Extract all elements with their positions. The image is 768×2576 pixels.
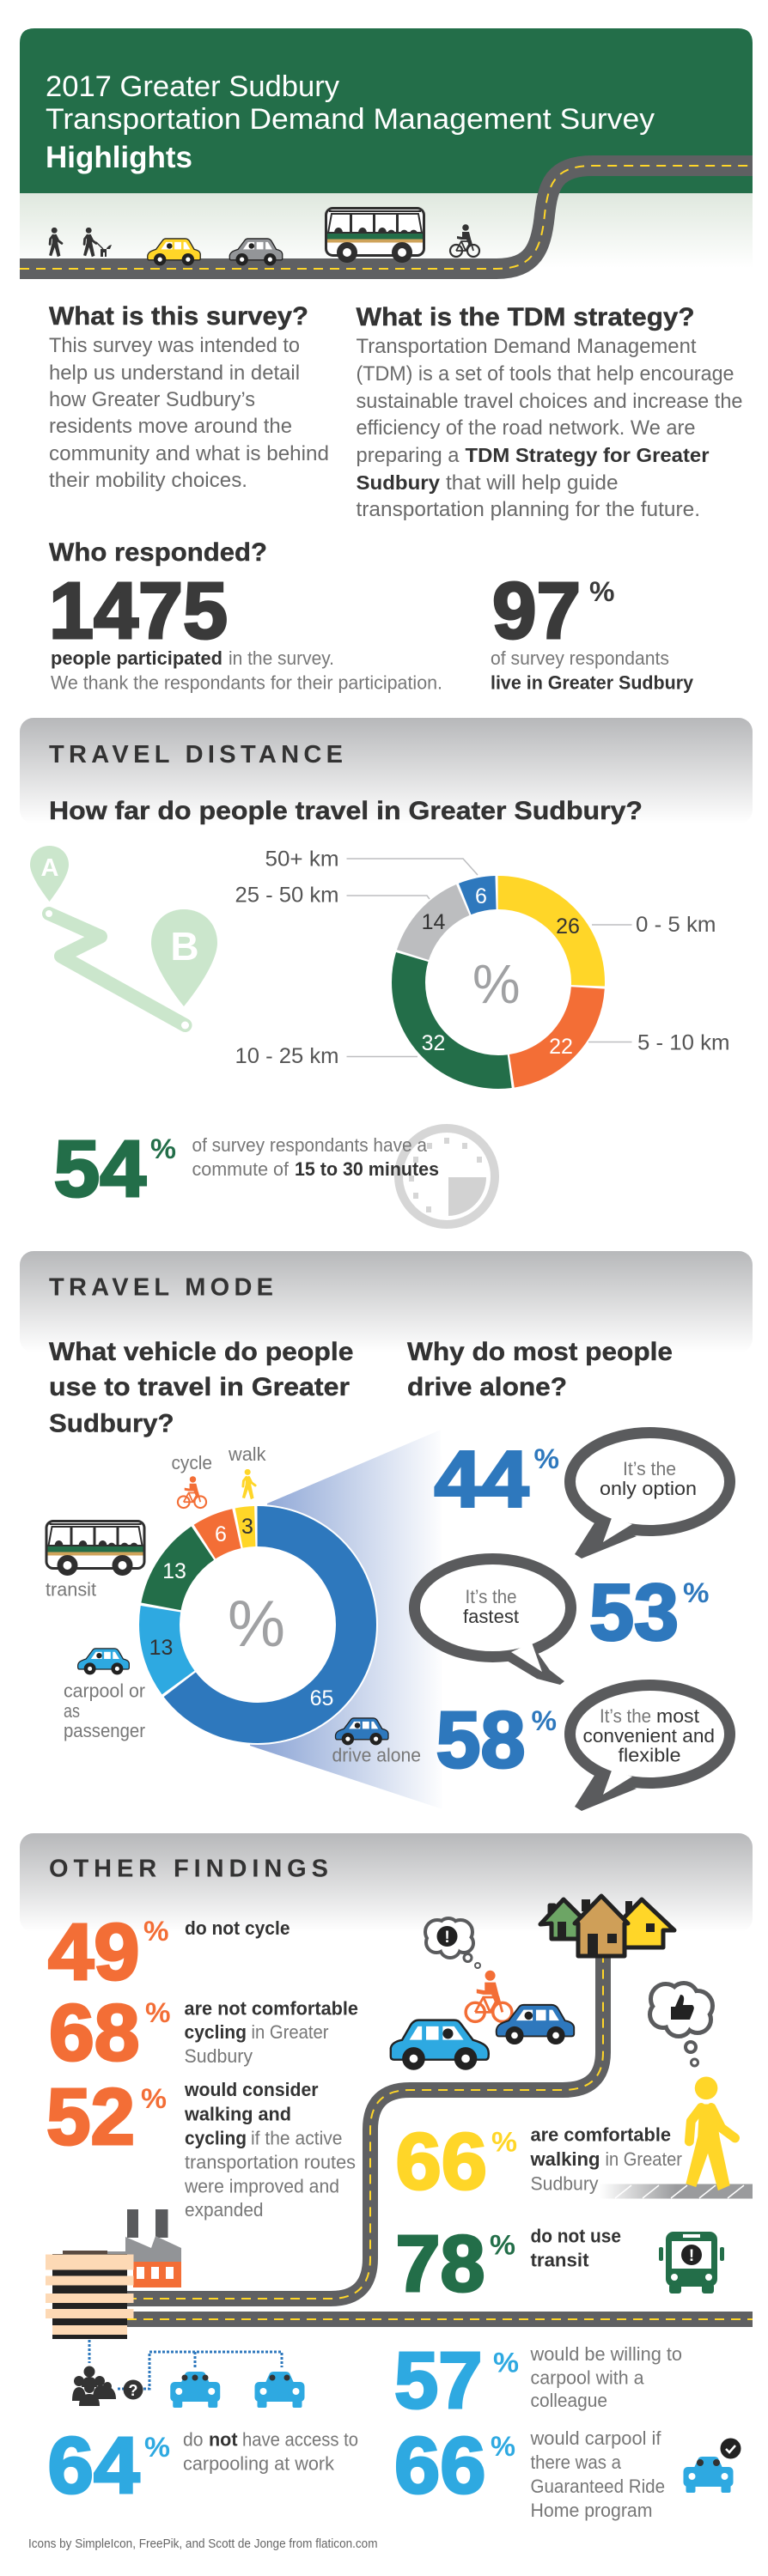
callout: most convenient and flexible: convenient and [582,1725,715,1747]
stat: 97 percent: 97 [492,566,581,655]
text block [49,334,329,492]
stat: 58 percent: % [531,1705,557,1736]
stat: 66 percent carpool [394,2421,665,2521]
label: carpool or as passenger: carpool or [64,1680,145,1702]
donut chart: travel mode: 6 [215,1522,227,1546]
section band [20,1833,753,1932]
callout: fastest: fastest [463,1606,519,1627]
donut chart: travel mode: 13 [162,1559,186,1583]
icon: person walking dog [83,228,112,257]
icon: map route with pins: A [41,854,59,882]
stat: 66 percent walking: 66 [395,2117,487,2206]
icon: worried thought bubble [427,1920,480,1968]
text block: sustainable travel choices and increase the [356,390,742,413]
text block: community and what is behind [49,442,329,465]
stat: 52 percent: % [141,2083,167,2114]
stat: 49 percent: 49 [48,1907,139,1996]
stat: 66 percent carpool: Home program [531,2500,653,2521]
callout: most convenient and flexible: flexible [619,1745,680,1765]
icon: group of people [72,2366,116,2406]
heading: why drive alone [407,1338,673,1401]
donut legend labels: 25 - 50 km [235,883,338,907]
stat: 57 percent [394,2336,682,2425]
text block: help us understand in detail [49,361,300,385]
donut chart: travel distance: 6 [475,884,487,908]
stat: 68 percent: 68 [49,1988,139,2077]
callout: only option [570,1432,730,1558]
heading: How far do people travel in Greater Sudbury? [49,797,643,825]
stat: 66 percent walking [395,2117,682,2206]
stat: 57 percent: carpool with a [531,2366,644,2389]
header green panel [20,28,753,193]
heading: what vehicle [49,1338,354,1437]
heading: What is this survey? [49,302,308,331]
stat: 57 percent: would be willing to [530,2343,682,2365]
donut chart: travel distance: 22 [549,1035,573,1059]
text block: transportation planning for the future. [356,498,700,521]
stat: 78 percent transit: transit [531,2250,589,2270]
stat: 64 percent: % [144,2432,170,2463]
stat: 64 percent: carpooling at work [183,2452,335,2475]
heading: What is the TDM strategy? [356,303,694,331]
panel: what is the TDM strategy [356,303,742,521]
text block: (TDM) is a set of tools that help encourage [356,362,734,386]
stat: 54 percent commute [53,1124,439,1213]
donut chart: travel distance: 14 [422,910,445,934]
stat: 66 percent walking: in Greater [605,2148,682,2170]
text block: TDM Strategy for Greater [466,444,710,466]
stat: 68 percent: Sudbury [184,2045,253,2067]
icon: yellow walker [686,2076,735,2190]
label: cycle: cycle [172,1452,212,1473]
callout: fastest [414,1559,570,1685]
stat: 64 percent: not [209,2428,238,2451]
section band [20,718,753,823]
panel: who responded [49,538,694,694]
icon: front-view bus [659,2232,724,2293]
stat: 1475 participants: We thank the respondants for their participation. [51,671,442,694]
donut chart: travel mode: 65 [310,1686,333,1710]
section band [20,1251,753,1352]
text block: how Greater Sudbury’s [49,388,255,411]
stat: 64 percent: 64 [48,2421,140,2510]
stat: 1475 participants: people participated [51,647,222,669]
stat: 66 percent walking: % [491,2126,517,2157]
stat: 57 percent: colleague [531,2390,607,2411]
header light band [20,193,753,268]
stat: 44 percent: % [534,1443,559,1474]
title: Highlights [46,141,192,174]
stat: 78 percent transit: % [490,2229,515,2260]
stat: 1475 participants: in the survey. [229,647,334,669]
label: transit [46,1522,144,1601]
text block: their mobility choices. [49,469,247,492]
title: Transportation Demand Management Survey [46,103,655,136]
icon: guaranteed ride car with check [684,2439,741,2493]
stat: 68 percent: are not comfortable [184,1997,358,2020]
heading: what vehicle: use to travel in Greater [49,1373,350,1401]
stat: 66 percent carpool: 66 [394,2421,486,2510]
stat: 66 percent carpool: would carpool if [530,2427,661,2449]
stat: 66 percent carpool: % [491,2431,515,2462]
stat: 66 percent walking: walking [529,2148,600,2170]
stat: 52 percent [46,2072,356,2221]
carpool network diagram [72,2340,304,2408]
stat: 66 percent carpool: Guaranteed Ride [531,2476,665,2497]
stat: 78 percent transit: do not use [531,2226,621,2246]
stat: 52 percent: transportation routes [185,2152,356,2172]
panel: travel mode [20,1251,753,1811]
stat: 52 percent: walking and [184,2104,291,2124]
panel: other findings [20,1833,753,2521]
stat: 68 percent [49,1988,358,2077]
stat: 58 percent: 58 [436,1695,526,1784]
icon: clock [399,1128,495,1224]
donut chart: travel mode: 3 [241,1515,253,1539]
text block: efficiency of the road network. We are [356,416,696,440]
header banner [20,28,753,269]
section title: TRAVEL MODE [49,1274,273,1302]
stat: 97 percent: % [589,576,615,607]
section title: TRAVEL DISTANCE [49,741,343,769]
label: carpool or as passenger [64,1649,145,1741]
stat: 1475 participants [49,566,442,694]
donut legend labels [235,847,730,1068]
panel: what is this survey [49,302,329,492]
icon: question mark: ? [129,2382,137,2399]
stat: 64 percent [48,2421,358,2510]
stat: 97 percent: of survey respondants [491,647,669,669]
text block: Sudbury [356,471,440,494]
icon: bus [326,208,424,263]
stat: 66 percent walking: Sudbury [531,2172,598,2195]
stat: 97 percent: live in Greater Sudbury [491,671,694,694]
icon: map route with pins: B [170,924,199,969]
panel: travel distance [20,718,753,1224]
label: carpool or as passenger: passenger [64,1720,145,1741]
donut chart: travel mode [137,1504,378,1745]
stat: 1475 participants: 1475 [49,566,228,655]
road [20,166,753,269]
label: carpool or as passenger: as [64,1700,80,1722]
callout: most convenient and flexible [570,1685,730,1811]
stat: 68 percent: % [145,1997,170,2028]
heading: Who responded? [49,538,267,567]
icon: thumbs-up thought bubble [652,1985,710,2066]
stat: 52 percent: if the active [251,2128,342,2148]
callout: only option: only option [600,1478,697,1499]
stat: 78 percent transit: 78 [395,2219,485,2308]
stat: 57 percent: 57 [394,2336,483,2425]
heading: why drive alone: drive alone? [407,1373,567,1401]
donut legend labels: 10 - 25 km [235,1044,338,1068]
credits footer: Icons by SimpleIcon, FreePik, and Scott de Jonge from flaticon.com [28,2537,378,2551]
stat: 52 percent: expanded [185,2199,263,2221]
text block: residents move around the [49,415,292,438]
stat: 54 percent commute: of survey respondants have a [192,1134,428,1156]
stat: 64 percent: do [183,2428,203,2451]
donut chart: travel distance: 26 [556,914,580,939]
gradient wedge [250,1430,442,1809]
icon: factory [103,2209,181,2287]
text block [356,335,742,521]
heading: what vehicle: Sudbury? [49,1410,174,1437]
stat: 66 percent carpool: there was a [531,2451,622,2473]
section title: OTHER FINDINGS [49,1855,328,1882]
stat: 52 percent: were improved and [184,2176,339,2196]
road network [127,1953,753,2319]
donut legend labels: 50+ km [265,847,338,871]
donut chart: travel distance [409,884,588,1072]
stat: 68 percent: in Greater [251,2021,328,2043]
stat: 54 percent commute: commute of [192,1158,290,1180]
callout: most convenient and flexible: most [656,1705,699,1727]
stat: 44 percent: 44 [435,1434,529,1523]
label: drive alone: drive alone [332,1745,421,1765]
stat: 52 percent: 52 [46,2072,135,2161]
heading: what vehicle: What vehicle do people [49,1338,354,1366]
stat: 54 percent commute: % [150,1133,176,1164]
callout: most convenient and flexible: It’s the [600,1705,651,1727]
stat: 53 percent: 53 [589,1568,679,1657]
icon: houses [540,1896,674,1956]
donut chart: travel mode: % [228,1588,285,1661]
stat: 54 percent commute: 54 [53,1124,146,1213]
stat: 57 percent: % [493,2348,519,2379]
sidewalk [600,2184,753,2198]
stat: 97 percent [491,566,694,694]
icon: map route with pins [30,846,217,1029]
label: walk [228,1443,266,1499]
donut legend labels: 5 - 10 km [637,1030,730,1054]
donut chart: travel distance: % [472,953,521,1015]
stat: 66 percent walking: are comfortable [531,2124,671,2145]
stat: 53 percent: % [683,1577,710,1608]
icon: pedestrian [49,228,62,257]
title: 2017 Greater Sudbury [46,70,339,103]
icon: cyclist between cars [391,1971,574,2070]
stat: 68 percent: cycling [184,2021,247,2043]
icon: yellow car [148,239,200,265]
icon: cyclist [450,224,479,257]
label: drive alone [332,1718,421,1765]
stat: 49 percent [48,1907,290,1996]
stat: 52 percent: cycling [185,2128,247,2148]
stat: 54 percent commute: 15 to 30 minutes [295,1158,439,1180]
stat: 78 percent transit [395,2219,621,2308]
label: transit: transit [46,1578,96,1601]
icon: question mark [124,2380,143,2399]
donut chart: travel mode: 13 [149,1636,173,1660]
stat: 49 percent: % [143,1916,168,1947]
stat: 64 percent: have access to [242,2428,358,2451]
icon: front-view bus: ! [689,2247,694,2265]
stat: 52 percent: would consider [184,2079,319,2100]
icon: carpool car 2 [254,2372,304,2408]
heading: why drive alone: Why do most people [407,1338,673,1366]
callout: fastest: It’s the [466,1586,517,1607]
text block: This survey was intended to [49,334,300,357]
callout: only option: It’s the [623,1458,676,1479]
donut chart: travel distance: 32 [422,1031,445,1055]
icon: worried thought bubble: ! [444,1929,450,1947]
icon: gray car [229,239,283,265]
text block: preparing a [356,444,460,467]
label: cycle [172,1452,212,1508]
stat: 49 percent: do not cycle [185,1917,290,1939]
icon: office tower [46,2251,134,2339]
label: walk: walk [228,1443,266,1465]
text block: that will help guide [446,471,619,495]
title [46,70,655,174]
donut legend labels: 0 - 5 km [636,913,716,937]
icon: carpool car 1 [170,2372,220,2408]
text block: Transportation Demand Management [356,335,697,358]
